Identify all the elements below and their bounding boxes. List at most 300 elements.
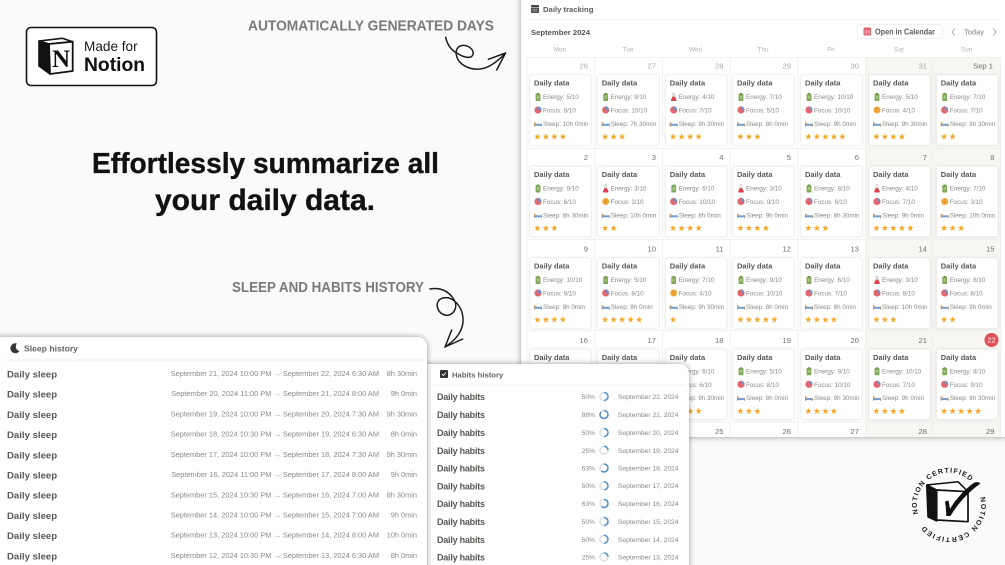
card: Sep 20: Focus: 10/10 bbox=[814, 382, 851, 389]
today marker: 22 bbox=[984, 333, 998, 347]
card: Sep 20: Energy: 9/10 bbox=[814, 368, 850, 375]
card: Aug 26: Energy: 5/10 bbox=[543, 94, 579, 101]
caption: automatically generated days: AUTOMATICALLY GENERATED DAYS bbox=[248, 18, 494, 34]
month heading: September 2024 bbox=[531, 28, 591, 37]
habit row 3 bbox=[437, 428, 679, 438]
open in calendar button: Open in Calendar bbox=[875, 28, 935, 37]
day numbers: 14 bbox=[919, 244, 927, 254]
day numbers: 26 bbox=[783, 427, 791, 436]
sleep row 1 bbox=[7, 369, 417, 380]
weekday headers: Mon bbox=[554, 47, 567, 54]
card: Sep 5: Sleep: 9h 0min bbox=[746, 212, 789, 219]
weekday headers: Tue bbox=[623, 47, 634, 54]
habit row 6: Daily habits bbox=[437, 481, 485, 491]
card: Aug 31 bbox=[869, 75, 930, 145]
weekday headers: Fri bbox=[827, 47, 835, 54]
sleep row 4: 8h 0min bbox=[391, 430, 417, 439]
headline: your daily data. bbox=[155, 184, 375, 217]
arrow: to calendar bbox=[446, 37, 506, 70]
card: Aug 30: ★★★★★ bbox=[804, 132, 847, 142]
sleep row 5: 9h 30min bbox=[387, 450, 417, 459]
card: Sep 21: Focus: 7/10 bbox=[882, 382, 915, 389]
card: Sep 5: ★★★★ bbox=[736, 224, 771, 234]
card: Aug 30: Focus: 10/10 bbox=[814, 108, 851, 114]
panel: habits history bbox=[410, 364, 689, 565]
sleep row 3 bbox=[7, 410, 417, 421]
card: Aug 31: ★★★★ bbox=[872, 132, 907, 142]
card: Sep 18: Energy: 6/10 bbox=[679, 368, 715, 375]
card: Sep 3: Sleep: 10h 0min bbox=[611, 212, 657, 219]
card: Sep 14: ★★★ bbox=[872, 316, 898, 326]
sleep row 7: Daily sleep bbox=[7, 491, 57, 502]
card: Sep 17: Daily data bbox=[602, 353, 638, 362]
habit row 1: 50% bbox=[582, 394, 595, 401]
card: Sep 20: Daily data bbox=[805, 353, 841, 362]
card: Sep 9: Daily data bbox=[534, 262, 570, 271]
sleep panel title: Sleep history bbox=[24, 343, 78, 353]
card: Sep 8: Focus: 3/10 bbox=[950, 199, 983, 206]
sleep row 6 bbox=[7, 470, 417, 481]
card: Sep 21: ★★★★ bbox=[872, 407, 907, 417]
card: Sep 13: ★★★★ bbox=[804, 316, 839, 326]
weekday headers: Wed bbox=[689, 47, 702, 54]
sleep row 5: Daily sleep bbox=[7, 450, 57, 461]
card: Sep 18: Focus: 6/10 bbox=[679, 382, 712, 389]
day numbers: 19 bbox=[783, 336, 791, 345]
habit row 6: 50% bbox=[582, 483, 595, 490]
card: Aug 27: Daily data bbox=[602, 79, 638, 88]
card: Aug 26 bbox=[530, 75, 591, 145]
card: Sep 7: Daily data bbox=[873, 170, 909, 179]
sleep row 1: September 21, 2024 10:00 PM → September 22, 2024 6:30 AM bbox=[171, 369, 379, 378]
habit row 7: Daily habits bbox=[437, 499, 485, 509]
card: Aug 29: Daily data bbox=[737, 79, 773, 88]
sleep row 3: September 19, 2024 10:00 PM → September 20, 2024 7:30 AM bbox=[171, 410, 379, 418]
sleep row 3: Daily sleep bbox=[7, 410, 57, 421]
card: Sep 3: Daily data bbox=[602, 170, 638, 179]
sleep row 8: 9h 0min bbox=[391, 510, 417, 520]
day numbers: 4 bbox=[719, 153, 724, 162]
card: Sep 8: ★★★ bbox=[940, 224, 966, 234]
card: Sep 1: Energy: 7/10 bbox=[950, 94, 986, 101]
card: Sep 4 bbox=[666, 166, 727, 236]
habit row 9 bbox=[437, 535, 679, 545]
card: Sep 12: Daily data bbox=[737, 262, 773, 271]
sleep row 8: Daily sleep bbox=[7, 511, 57, 522]
card: Sep 4: ★★★★ bbox=[669, 224, 703, 234]
habit row 4: Daily habits bbox=[437, 446, 485, 456]
card: Aug 28 bbox=[666, 75, 727, 145]
card: Sep 11: Daily data bbox=[670, 262, 706, 271]
card: Sep 14 bbox=[869, 258, 930, 328]
sleep row 7: September 15, 2024 10:30 PM → September 16, 2024 7:00 AM bbox=[171, 490, 379, 499]
sleep row 5: September 17, 2024 10:00 PM → September 18, 2024 7:30 AM bbox=[171, 450, 379, 459]
card: Sep 21: Energy: 10/10 bbox=[882, 368, 922, 375]
card: Sep 18: Sleep: 9h 30min bbox=[679, 395, 725, 402]
month navigation bbox=[952, 28, 996, 36]
card: Sep 5: Focus: 9/10 bbox=[746, 199, 779, 206]
card: Sep 8: Daily data bbox=[941, 170, 977, 179]
card: Sep 15: Energy: 6/10 bbox=[950, 277, 986, 284]
card: Aug 27: Energy: 9/10 bbox=[611, 94, 647, 101]
card: Aug 26: Focus: 8/10 bbox=[543, 108, 576, 114]
sleep row 2: 9h 0min bbox=[391, 389, 417, 398]
habit row 4 bbox=[437, 446, 679, 456]
habit row 9: September 14, 2024 bbox=[618, 537, 679, 544]
sleep row 9 bbox=[7, 531, 417, 542]
card: Aug 26: Sleep: 10h 0min bbox=[543, 121, 589, 128]
card: Sep 11: ★ bbox=[669, 316, 678, 326]
card: Sep 11 bbox=[666, 258, 727, 328]
card: Sep 1: ★★ bbox=[940, 132, 957, 142]
card: Sep 19 bbox=[733, 349, 794, 419]
sleep row 4 bbox=[7, 430, 417, 441]
day numbers: 3 bbox=[652, 153, 656, 162]
day numbers: 21 bbox=[919, 336, 927, 345]
card: Sep 10: Focus: 8/10 bbox=[611, 290, 644, 298]
circular badge text bbox=[912, 468, 986, 542]
card: Aug 28: Daily data bbox=[670, 79, 706, 88]
sleep row 6: 9h 0min bbox=[391, 470, 417, 479]
habit row 10 bbox=[437, 552, 679, 562]
card: Sep 10: ★★★★★ bbox=[601, 316, 644, 326]
day numbers: 16 bbox=[580, 336, 588, 345]
card: Sep 8: Sleep: 10h 0min bbox=[950, 212, 996, 219]
card: Sep 1: Daily data bbox=[941, 79, 977, 88]
card: Sep 12: Sleep: 8h 0min bbox=[746, 304, 789, 311]
card: Sep 14: Daily data bbox=[873, 262, 909, 271]
card: Sep 14: Sleep: 10h 0min bbox=[882, 304, 928, 311]
card: Sep 10: Daily data bbox=[602, 262, 638, 271]
card: Sep 2 bbox=[530, 166, 591, 236]
sleep row 6: September 16, 2024 11:00 PM → September 17, 2024 8:00 AM bbox=[171, 470, 379, 479]
habit row 8: 50% bbox=[582, 519, 595, 526]
card: Sep 6: Daily data bbox=[805, 170, 841, 179]
day numbers: 11 bbox=[716, 244, 724, 254]
card: Sep 20: ★★★★ bbox=[804, 407, 839, 417]
card: Sep 21: Daily data bbox=[873, 353, 909, 362]
card: Aug 28: Sleep: 9h 30min bbox=[679, 121, 725, 128]
weekday headers bbox=[554, 47, 973, 54]
card: Sep 4: Energy: 6/10 bbox=[679, 186, 715, 193]
card: Sep 3: Focus: 3/10 bbox=[611, 199, 644, 206]
card: Sep 21 bbox=[869, 349, 930, 419]
icon: cube with check mark bbox=[927, 482, 980, 522]
card: Sep 9: Sleep: 8h 0min bbox=[543, 304, 586, 311]
card: Aug 30: Energy: 10/10 bbox=[814, 94, 854, 101]
card: Aug 27: Focus: 10/10 bbox=[611, 108, 648, 114]
card: Sep 19: Daily data bbox=[737, 353, 773, 362]
card: Sep 12: Focus: 10/10 bbox=[746, 290, 783, 298]
habit row 1: September 22, 2024 bbox=[618, 394, 679, 401]
card: Sep 6 bbox=[801, 166, 862, 236]
card: Sep 22: Energy: 8/10 bbox=[950, 368, 986, 375]
card: Aug 27: ★★★ bbox=[601, 132, 627, 142]
card: Sep 2: Sleep: 8h 30min bbox=[543, 212, 589, 219]
card: Sep 2: Daily data bbox=[534, 170, 570, 179]
card: Sep 21: Sleep: 9h 0min bbox=[882, 395, 925, 402]
card: Sep 12: ★★★★★ bbox=[736, 316, 779, 326]
habit row 4: 25% bbox=[582, 448, 595, 455]
day numbers: 28 bbox=[919, 427, 927, 436]
day numbers: 12 bbox=[783, 244, 791, 254]
card: Sep 3 bbox=[598, 166, 659, 236]
card: Aug 29: Energy: 7/10 bbox=[746, 94, 782, 101]
habit row 2: 88% bbox=[582, 412, 595, 419]
sleep row 1: 8h 30min bbox=[387, 369, 417, 378]
card: Sep 4: Focus: 10/10 bbox=[679, 199, 716, 206]
day numbers: 28 bbox=[715, 62, 724, 70]
habit row 5: Daily habits bbox=[437, 464, 485, 474]
habit row 10: Daily habits bbox=[437, 552, 485, 562]
card: Aug 28: Focus: 7/10 bbox=[679, 108, 712, 114]
card: Sep 16 bbox=[530, 349, 591, 419]
card: Sep 6: ★★★ bbox=[804, 224, 830, 234]
open in calendar button bbox=[858, 24, 942, 38]
sleep row 7: 8h 30min bbox=[387, 490, 417, 499]
sleep row 9: 10h 0min bbox=[387, 531, 417, 540]
sleep row 10: September 12, 2024 10:30 PM → September 13, 2024 6:30 AM bbox=[171, 551, 379, 560]
card: Sep 4: Daily data bbox=[670, 170, 706, 179]
card: Sep 2: Focus: 6/10 bbox=[543, 199, 576, 206]
habit row 5: 63% bbox=[582, 466, 595, 472]
sleep row 1: Daily sleep bbox=[7, 370, 57, 380]
card: Sep 14: Focus: 9/10 bbox=[882, 290, 915, 298]
badge text: Made for bbox=[84, 39, 138, 54]
habit row 10: September 13, 2024 bbox=[618, 554, 679, 562]
day numbers: 27 bbox=[648, 62, 656, 70]
card: Sep 1: Focus: 7/10 bbox=[950, 108, 983, 114]
habit row 9: Daily habits bbox=[437, 535, 485, 545]
day numbers: 13 bbox=[851, 244, 859, 254]
card: Sep 2: Energy: 9/10 bbox=[543, 186, 579, 193]
badge: made for Notion bbox=[26, 28, 156, 86]
card: Sep 9: Energy: 10/10 bbox=[543, 277, 583, 284]
sleep row 6: Daily sleep bbox=[7, 470, 57, 481]
card: Aug 27 bbox=[598, 75, 659, 145]
card: Sep 3: Energy: 3/10 bbox=[611, 186, 647, 193]
habit row 1 bbox=[437, 392, 679, 402]
habit row 6 bbox=[437, 481, 679, 491]
card: Sep 13: Focus: 7/10 bbox=[814, 290, 847, 298]
day numbers: 10 bbox=[648, 244, 656, 254]
card: Sep 22: Daily data bbox=[941, 353, 977, 362]
card: Sep 2: ★★★ bbox=[534, 224, 559, 234]
sleep row 4: Daily sleep bbox=[7, 430, 57, 441]
habit row 3: Daily habits bbox=[437, 428, 485, 438]
card: Sep 18: Daily data bbox=[670, 353, 706, 362]
habit row 4: September 19, 2024 bbox=[618, 448, 679, 455]
card: Sep 13: Energy: 6/10 bbox=[814, 277, 850, 284]
card: Sep 19: ★★★ bbox=[736, 407, 762, 417]
sleep row 8 bbox=[7, 510, 417, 522]
card: Sep 7: Energy: 4/10 bbox=[882, 186, 918, 193]
card: Sep 10: Sleep: 8h 0min bbox=[611, 304, 653, 311]
habit row 3: 50% bbox=[582, 430, 595, 437]
card: Sep 17 bbox=[598, 349, 659, 419]
sleep row 2 bbox=[7, 389, 417, 400]
day numbers: 6 bbox=[855, 153, 859, 162]
habit row 8: September 15, 2024 bbox=[618, 519, 679, 526]
card: Sep 20 bbox=[801, 349, 862, 419]
card: Sep 8 bbox=[937, 166, 998, 236]
day numbers: 30 bbox=[851, 62, 859, 70]
day numbers: 29 bbox=[783, 62, 791, 70]
card: Aug 26: Daily data bbox=[534, 79, 570, 88]
caption: sleep and habits history: SLEEP AND HABITS HISTORY bbox=[232, 280, 424, 296]
habit row 1: Daily habits bbox=[437, 392, 485, 402]
card: Aug 30: Sleep: 9h 0min bbox=[814, 121, 857, 128]
day numbers: 20 bbox=[851, 336, 859, 345]
habit row 8: Daily habits bbox=[437, 517, 485, 527]
card: Sep 7: Sleep: 9h 0min bbox=[882, 212, 925, 219]
month navigation: Today bbox=[964, 28, 984, 36]
card: Aug 30 bbox=[801, 75, 862, 145]
habit row 7: 63% bbox=[582, 501, 595, 508]
card: Sep 13: Sleep: 8h 0min bbox=[814, 304, 857, 311]
card: Sep 19: Energy: 5/10 bbox=[746, 368, 782, 375]
habits panel title: Habits history bbox=[452, 370, 504, 379]
card: Aug 27: Sleep: 7h 30min bbox=[611, 121, 657, 128]
card: Sep 14: Energy: 3/10 bbox=[882, 277, 918, 284]
card: Sep 15: Focus: 8/10 bbox=[950, 290, 983, 298]
card: Sep 1: Sleep: 8h 30min bbox=[950, 121, 996, 128]
card: Sep 15: Sleep: 9h 0min bbox=[950, 304, 992, 311]
habit row 5: September 18, 2024 bbox=[618, 466, 679, 472]
card: Sep 12 bbox=[733, 258, 794, 328]
day numbers: 29 bbox=[986, 427, 994, 436]
weekday headers: Sat bbox=[894, 47, 904, 54]
card: Sep 18 bbox=[666, 349, 727, 419]
card: Sep 12: Energy: 9/10 bbox=[746, 277, 782, 284]
day numbers: 18 bbox=[715, 336, 724, 345]
day numbers: 26 bbox=[580, 62, 588, 70]
circular badge text: NOTION CERTIFIED bbox=[922, 497, 986, 542]
card: Sep 7: Focus: 7/10 bbox=[882, 199, 915, 206]
card: Sep 11: Focus: 4/10 bbox=[679, 290, 712, 298]
badge text: Notion bbox=[84, 55, 145, 76]
icon: Notion cube: N bbox=[52, 46, 70, 73]
habit row 9: 50% bbox=[582, 537, 595, 544]
card: Aug 28: ★★★★ bbox=[669, 132, 703, 142]
panel: daily tracking calendar bbox=[521, 0, 1005, 437]
card: Sep 6: Sleep: 8h 30min bbox=[814, 212, 860, 219]
circular badge text: NOTION CERTIFIED bbox=[912, 468, 972, 514]
sleep row 5 bbox=[7, 450, 417, 461]
card: Sep 15 bbox=[937, 258, 998, 328]
card: Sep 10 bbox=[598, 258, 659, 328]
card: Sep 9: Focus: 9/10 bbox=[543, 290, 576, 298]
card: Sep 11: Sleep: 9h 30min bbox=[679, 304, 725, 311]
card: Sep 6: Energy: 8/10 bbox=[814, 186, 850, 193]
card: Sep 6: Focus: 6/10 bbox=[814, 199, 847, 206]
day numbers: 17 bbox=[648, 336, 656, 345]
headline: Effortlessly summarize all bbox=[92, 148, 439, 180]
card: Sep 22: ★★★★★ bbox=[940, 407, 983, 417]
card: Sep 9 bbox=[530, 258, 591, 328]
badge: Notion certified bbox=[912, 468, 986, 542]
card: Sep 22: Sleep: 8h 30min bbox=[950, 395, 996, 402]
habit row 2: September 21, 2024 bbox=[618, 412, 679, 419]
card: Sep 11: Energy: 7/10 bbox=[679, 277, 715, 284]
habit row 3: September 20, 2024 bbox=[618, 430, 679, 437]
card: Sep 15: ★★ bbox=[940, 316, 957, 326]
card: Sep 10: Energy: 5/10 bbox=[611, 277, 647, 284]
card: Aug 31: Sleep: 9h 30min bbox=[882, 121, 928, 128]
card: Sep 18: ★★★★ bbox=[669, 407, 703, 417]
sleep row 3: 9h 30min bbox=[387, 410, 417, 418]
sleep row 10 bbox=[7, 551, 417, 562]
card: Sep 5: Daily data bbox=[737, 170, 773, 179]
card: Sep 19: Focus: 8/10 bbox=[746, 382, 779, 389]
sleep row 2: Daily sleep bbox=[7, 390, 57, 400]
headline bbox=[92, 148, 439, 217]
sleep row 9: September 13, 2024 10:00 PM → September 14, 2024 8:00 AM bbox=[171, 531, 379, 540]
day numbers: 25 bbox=[715, 427, 724, 436]
day numbers: 5 bbox=[787, 153, 791, 162]
day numbers: 15 bbox=[986, 244, 994, 254]
habit row 5 bbox=[437, 464, 679, 474]
card: Aug 31: Focus: 4/10 bbox=[882, 108, 915, 114]
card: Sep 3: ★★ bbox=[601, 224, 618, 234]
panel: sleep history bbox=[0, 337, 427, 565]
card: Sep 8: Energy: 7/10 bbox=[950, 186, 986, 193]
sleep row 9: Daily sleep bbox=[7, 531, 57, 542]
card: Sep 5 bbox=[733, 166, 794, 236]
card: Aug 29: Focus: 5/10 bbox=[746, 108, 779, 114]
sleep row 10: Daily sleep bbox=[7, 551, 57, 562]
card: Aug 26: ★★★★ bbox=[534, 132, 568, 142]
sleep row 2: September 20, 2024 11:00 PM → September 21, 2024 8:00 AM bbox=[171, 389, 379, 398]
card: Sep 20: Sleep: 9h 30min bbox=[814, 395, 860, 402]
card: Sep 13: Daily data bbox=[805, 262, 841, 271]
sleep row 7 bbox=[7, 490, 417, 502]
day numbers: 9 bbox=[584, 244, 588, 254]
card: Sep 9: ★★★★ bbox=[534, 316, 568, 326]
card: Sep 22: Focus: 9/10 bbox=[950, 382, 983, 389]
card: Sep 7 bbox=[869, 166, 930, 236]
card: Sep 13 bbox=[801, 258, 862, 328]
day numbers: 2 bbox=[584, 153, 588, 162]
card: Aug 31: Daily data bbox=[873, 79, 909, 88]
habit row 10: 25% bbox=[582, 554, 595, 562]
card: Aug 29: Sleep: 8h 0min bbox=[746, 121, 789, 128]
habit row 2: Daily habits bbox=[437, 410, 485, 420]
day numbers: 31 bbox=[919, 62, 927, 70]
habit row 7 bbox=[437, 499, 679, 509]
calendar title: Daily tracking bbox=[543, 5, 594, 14]
day numbers: 8 bbox=[990, 153, 994, 162]
weekday headers: Thu bbox=[757, 47, 769, 54]
sleep row 10: 8h 0min bbox=[391, 551, 417, 560]
card: Sep 19: Sleep: 8h 0min bbox=[746, 395, 789, 402]
weekend shading bbox=[866, 58, 1000, 437]
card: Aug 31: Energy: 5/10 bbox=[882, 94, 918, 101]
day numbers: 27 bbox=[851, 427, 859, 436]
card: Aug 29 bbox=[733, 75, 794, 145]
today marker: 22: 22 bbox=[987, 336, 996, 345]
card: Sep 4: Sleep: 8h 0min bbox=[679, 212, 721, 219]
card: Sep 15: Daily data bbox=[941, 262, 977, 271]
sleep row 4: September 18, 2024 10:30 PM → September 19, 2024 6:30 AM bbox=[171, 430, 379, 439]
sleep row 8: September 14, 2024 10:00 PM → September 15, 2024 7:00 AM bbox=[171, 510, 379, 520]
card: Sep 1 bbox=[937, 75, 998, 145]
card: Sep 7: ★★★★★ bbox=[872, 224, 915, 234]
day numbers: Sep 1 bbox=[973, 62, 993, 70]
day numbers: 7 bbox=[923, 153, 927, 162]
card: Aug 30: Daily data bbox=[805, 79, 841, 88]
habit row 2 bbox=[437, 410, 679, 420]
